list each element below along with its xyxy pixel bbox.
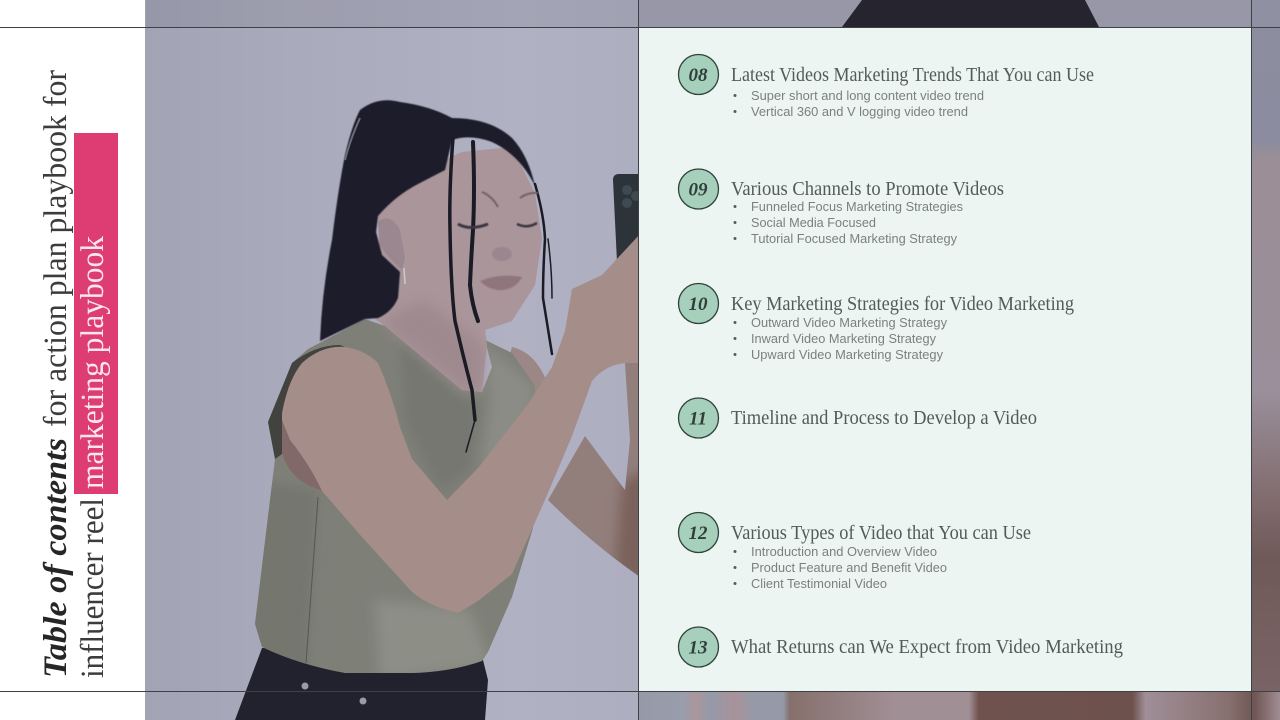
photo: ear (378, 218, 405, 270)
photo: shoulder, upper arm, forearm and hand (282, 234, 640, 613)
left white title column (0, 0, 145, 720)
item 10 (678, 284, 1074, 362)
item 12: Introduction and Overview Video (751, 545, 937, 559)
item 08: Vertical 360 and V logging video trend (751, 105, 968, 119)
item 11 (678, 398, 1037, 438)
photo: neck and face (375, 147, 542, 392)
photo: jeans (235, 648, 488, 720)
item 08 (678, 54, 1094, 119)
item 09: Tutorial Focused Marketing Strategy (751, 232, 958, 246)
background strip: right (1251, 27, 1280, 691)
item 10: Key Marketing Strategies for Video Marketing (731, 294, 1074, 315)
item 09: Various Channels to Promote Videos (731, 179, 1004, 200)
item 13 (678, 627, 1123, 667)
background strip: bottom (639, 691, 1280, 720)
photo: phone (613, 174, 640, 262)
photo: arm behind (548, 363, 640, 577)
title line 2: influencer reel (75, 498, 111, 678)
item 09: Funneled Focus Marketing Strategies (751, 200, 963, 214)
item 09 (678, 169, 1004, 246)
item 10: 10 (688, 294, 708, 315)
title line 2 highlighted: marketing playbook (75, 236, 111, 489)
item 12 (678, 512, 1031, 591)
item 09: Social Media Focused (751, 216, 876, 230)
title line 1: Table of contents (38, 438, 74, 678)
item 12: Client Testimonial Video (751, 577, 887, 591)
item 10: Outward Video Marketing Strategy (751, 316, 948, 330)
pink highlight bar (74, 133, 118, 494)
content panel (639, 28, 1251, 691)
item 13: What Returns can We Expect from Video Marketing (731, 637, 1123, 658)
photo: khaki top (255, 319, 535, 673)
item 10: Inward Video Marketing Strategy (751, 332, 937, 346)
title line 1 continued: for action plan playbook for (38, 70, 74, 427)
item 08: 08 (688, 65, 708, 86)
item 11: 11 (689, 408, 707, 430)
item 11: Timeline and Process to Develop a Video (731, 408, 1037, 429)
photo: braids (450, 138, 552, 452)
item 12: Various Types of Video that You can Use (731, 523, 1031, 544)
item 08: Super short and long content video trend (751, 89, 984, 103)
item 10: Upward Video Marketing Strategy (751, 348, 944, 362)
photo: facial features (458, 192, 538, 290)
item 08: Latest Videos Marketing Trends That You can Use (731, 65, 1094, 86)
photo: hair and ponytail (320, 100, 535, 341)
photo: woman filming herself with a phone (145, 0, 650, 720)
item 12: 12 (688, 523, 708, 544)
title (38, 70, 118, 678)
background strip: top (639, 0, 1280, 27)
photo: strap edge (268, 345, 345, 459)
item 13: 13 (688, 638, 708, 658)
item 09: 09 (688, 180, 708, 200)
item 12: Product Feature and Benefit Video (751, 561, 947, 575)
